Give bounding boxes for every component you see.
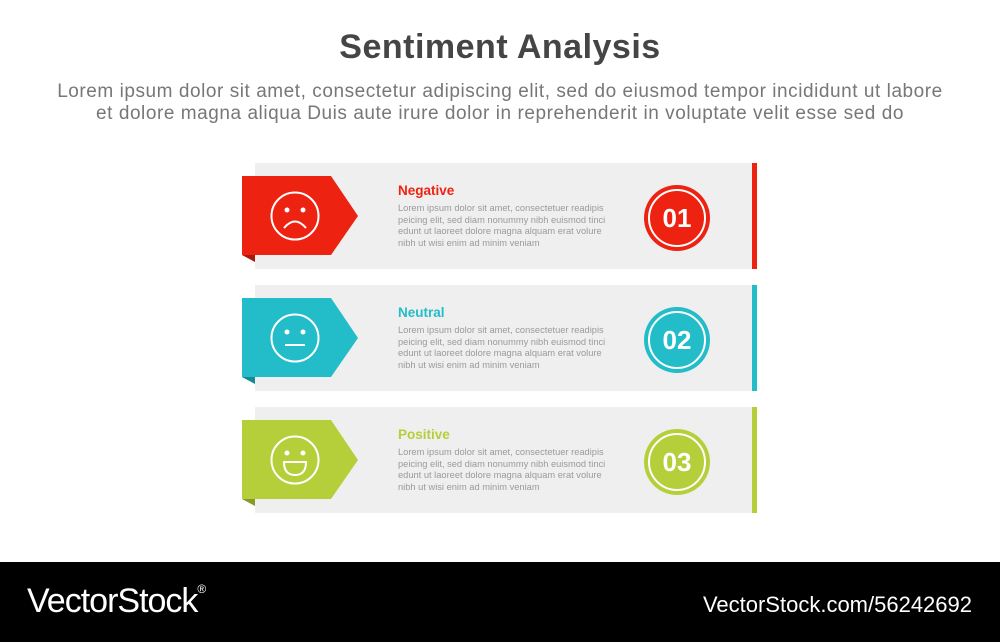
- heading: Positive: [398, 427, 450, 442]
- icon: sad tag: [242, 176, 358, 262]
- footer: [0, 562, 1000, 642]
- row: positive: [242, 407, 757, 513]
- icon: neutral tag: [242, 298, 358, 384]
- heading: Negative: [398, 183, 454, 198]
- title: Sentiment Analysis: [339, 28, 661, 66]
- subtitle: et dolore magna aliqua Duis aute irure dolor in reprehenderit in voluptate velit esse sed do: [96, 103, 904, 124]
- text: Lorem ipsum dolor sit amet, consectetuer readipis peicing elit, sed diam nonummy nibh euismod tinci edunt ut laoreet dolore magna alquam erat volure nibh ut wisi enim ad minim veniam: [398, 325, 605, 370]
- number badge: [644, 429, 710, 495]
- footer logo: VectorStock®: [27, 582, 205, 620]
- number badge: 02: [663, 325, 691, 355]
- row: neutral: [242, 285, 757, 391]
- number badge: 01: [663, 203, 691, 233]
- icon: happy tag: [242, 420, 358, 506]
- number badge: 03: [663, 447, 691, 477]
- footer url: VectorStock.com/56242692: [703, 592, 972, 617]
- subtitle: Lorem ipsum dolor sit amet, consectetur adipiscing elit, sed do eiusmod tempor incididunt ut labore: [57, 81, 943, 102]
- subtitle: [57, 81, 943, 124]
- number badge: [644, 185, 710, 251]
- text: Lorem ipsum dolor sit amet, consectetuer readipis peicing elit, sed diam nonummy nibh euismod tinci edunt ut laoreet dolore magna alquam erat volure nibh ut wisi enim ad minim veniam: [398, 203, 605, 248]
- number badge: [644, 307, 710, 373]
- heading: Neutral: [398, 305, 445, 320]
- row: negative: [242, 163, 757, 269]
- text: Lorem ipsum dolor sit amet, consectetuer readipis peicing elit, sed diam nonummy nibh euismod tinci edunt ut laoreet dolore magna alquam erat volure nibh ut wisi enim ad minim veniam: [398, 447, 605, 492]
